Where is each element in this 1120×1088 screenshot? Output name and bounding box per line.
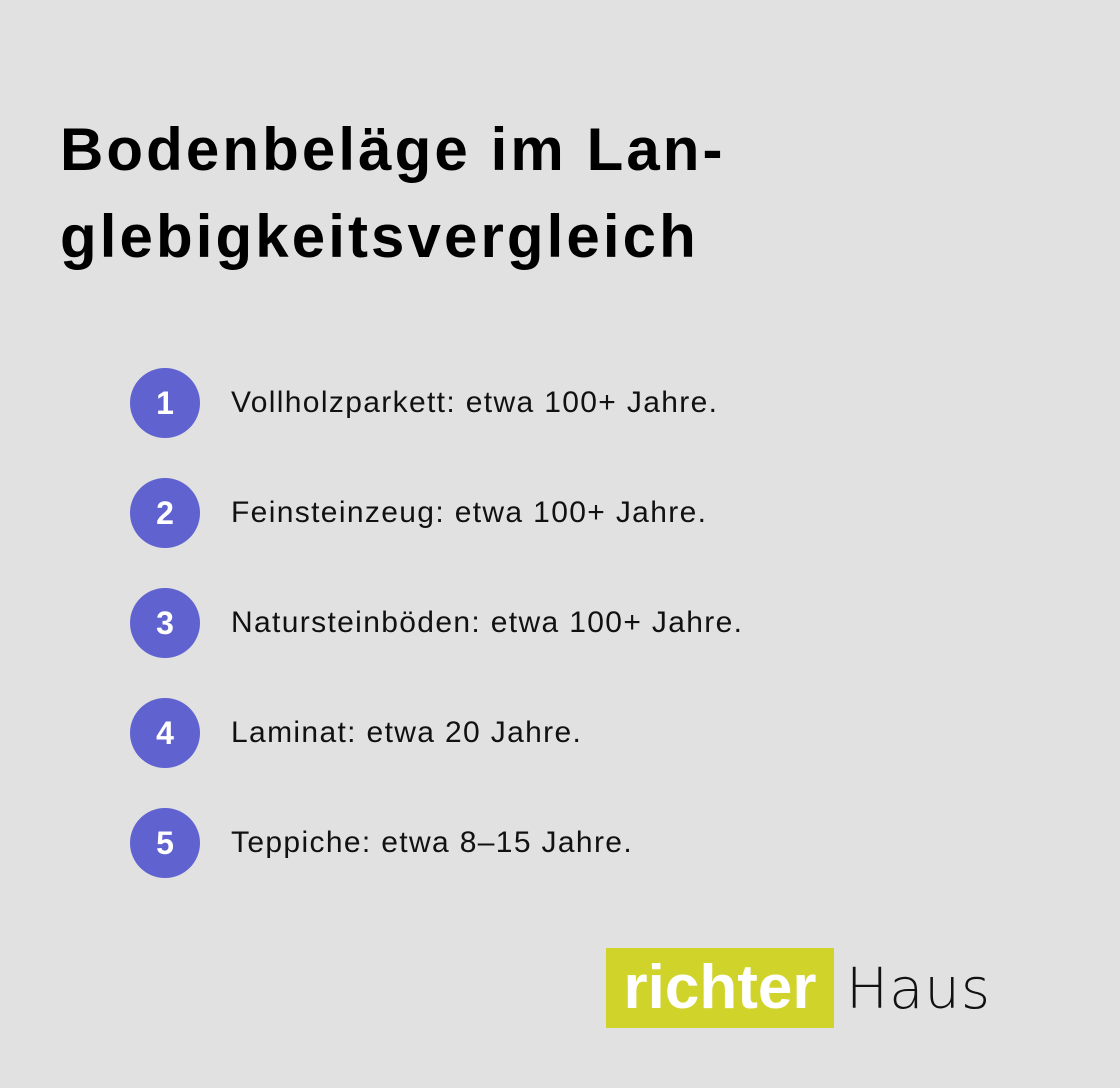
item 5: 5 <box>156 825 174 861</box>
logo: Haus <box>846 957 991 1022</box>
item 4 <box>130 698 582 768</box>
title: Bodenbeläge im Lan- <box>60 116 726 183</box>
item 5: Teppiche: etwa 8–15 Jahre. <box>231 826 633 859</box>
item 5 <box>130 808 633 878</box>
item 4: 4 <box>156 715 174 751</box>
item 1: Vollholzparkett: etwa 100+ Jahre. <box>231 386 718 419</box>
item 2 <box>130 478 707 548</box>
logo <box>606 948 991 1028</box>
item 3: Natursteinböden: etwa 100+ Jahre. <box>231 606 743 639</box>
item 3: 3 <box>156 605 174 641</box>
item 1: 1 <box>156 385 174 421</box>
item 1 <box>130 368 718 438</box>
logo: richter <box>624 953 816 1022</box>
title: glebigkeitsvergleich <box>60 203 699 270</box>
item 3 <box>130 588 743 658</box>
item 2: 2 <box>156 495 174 531</box>
item 2: Feinsteinzeug: etwa 100+ Jahre. <box>231 496 707 529</box>
item 4: Laminat: etwa 20 Jahre. <box>231 716 582 749</box>
title <box>60 116 726 270</box>
